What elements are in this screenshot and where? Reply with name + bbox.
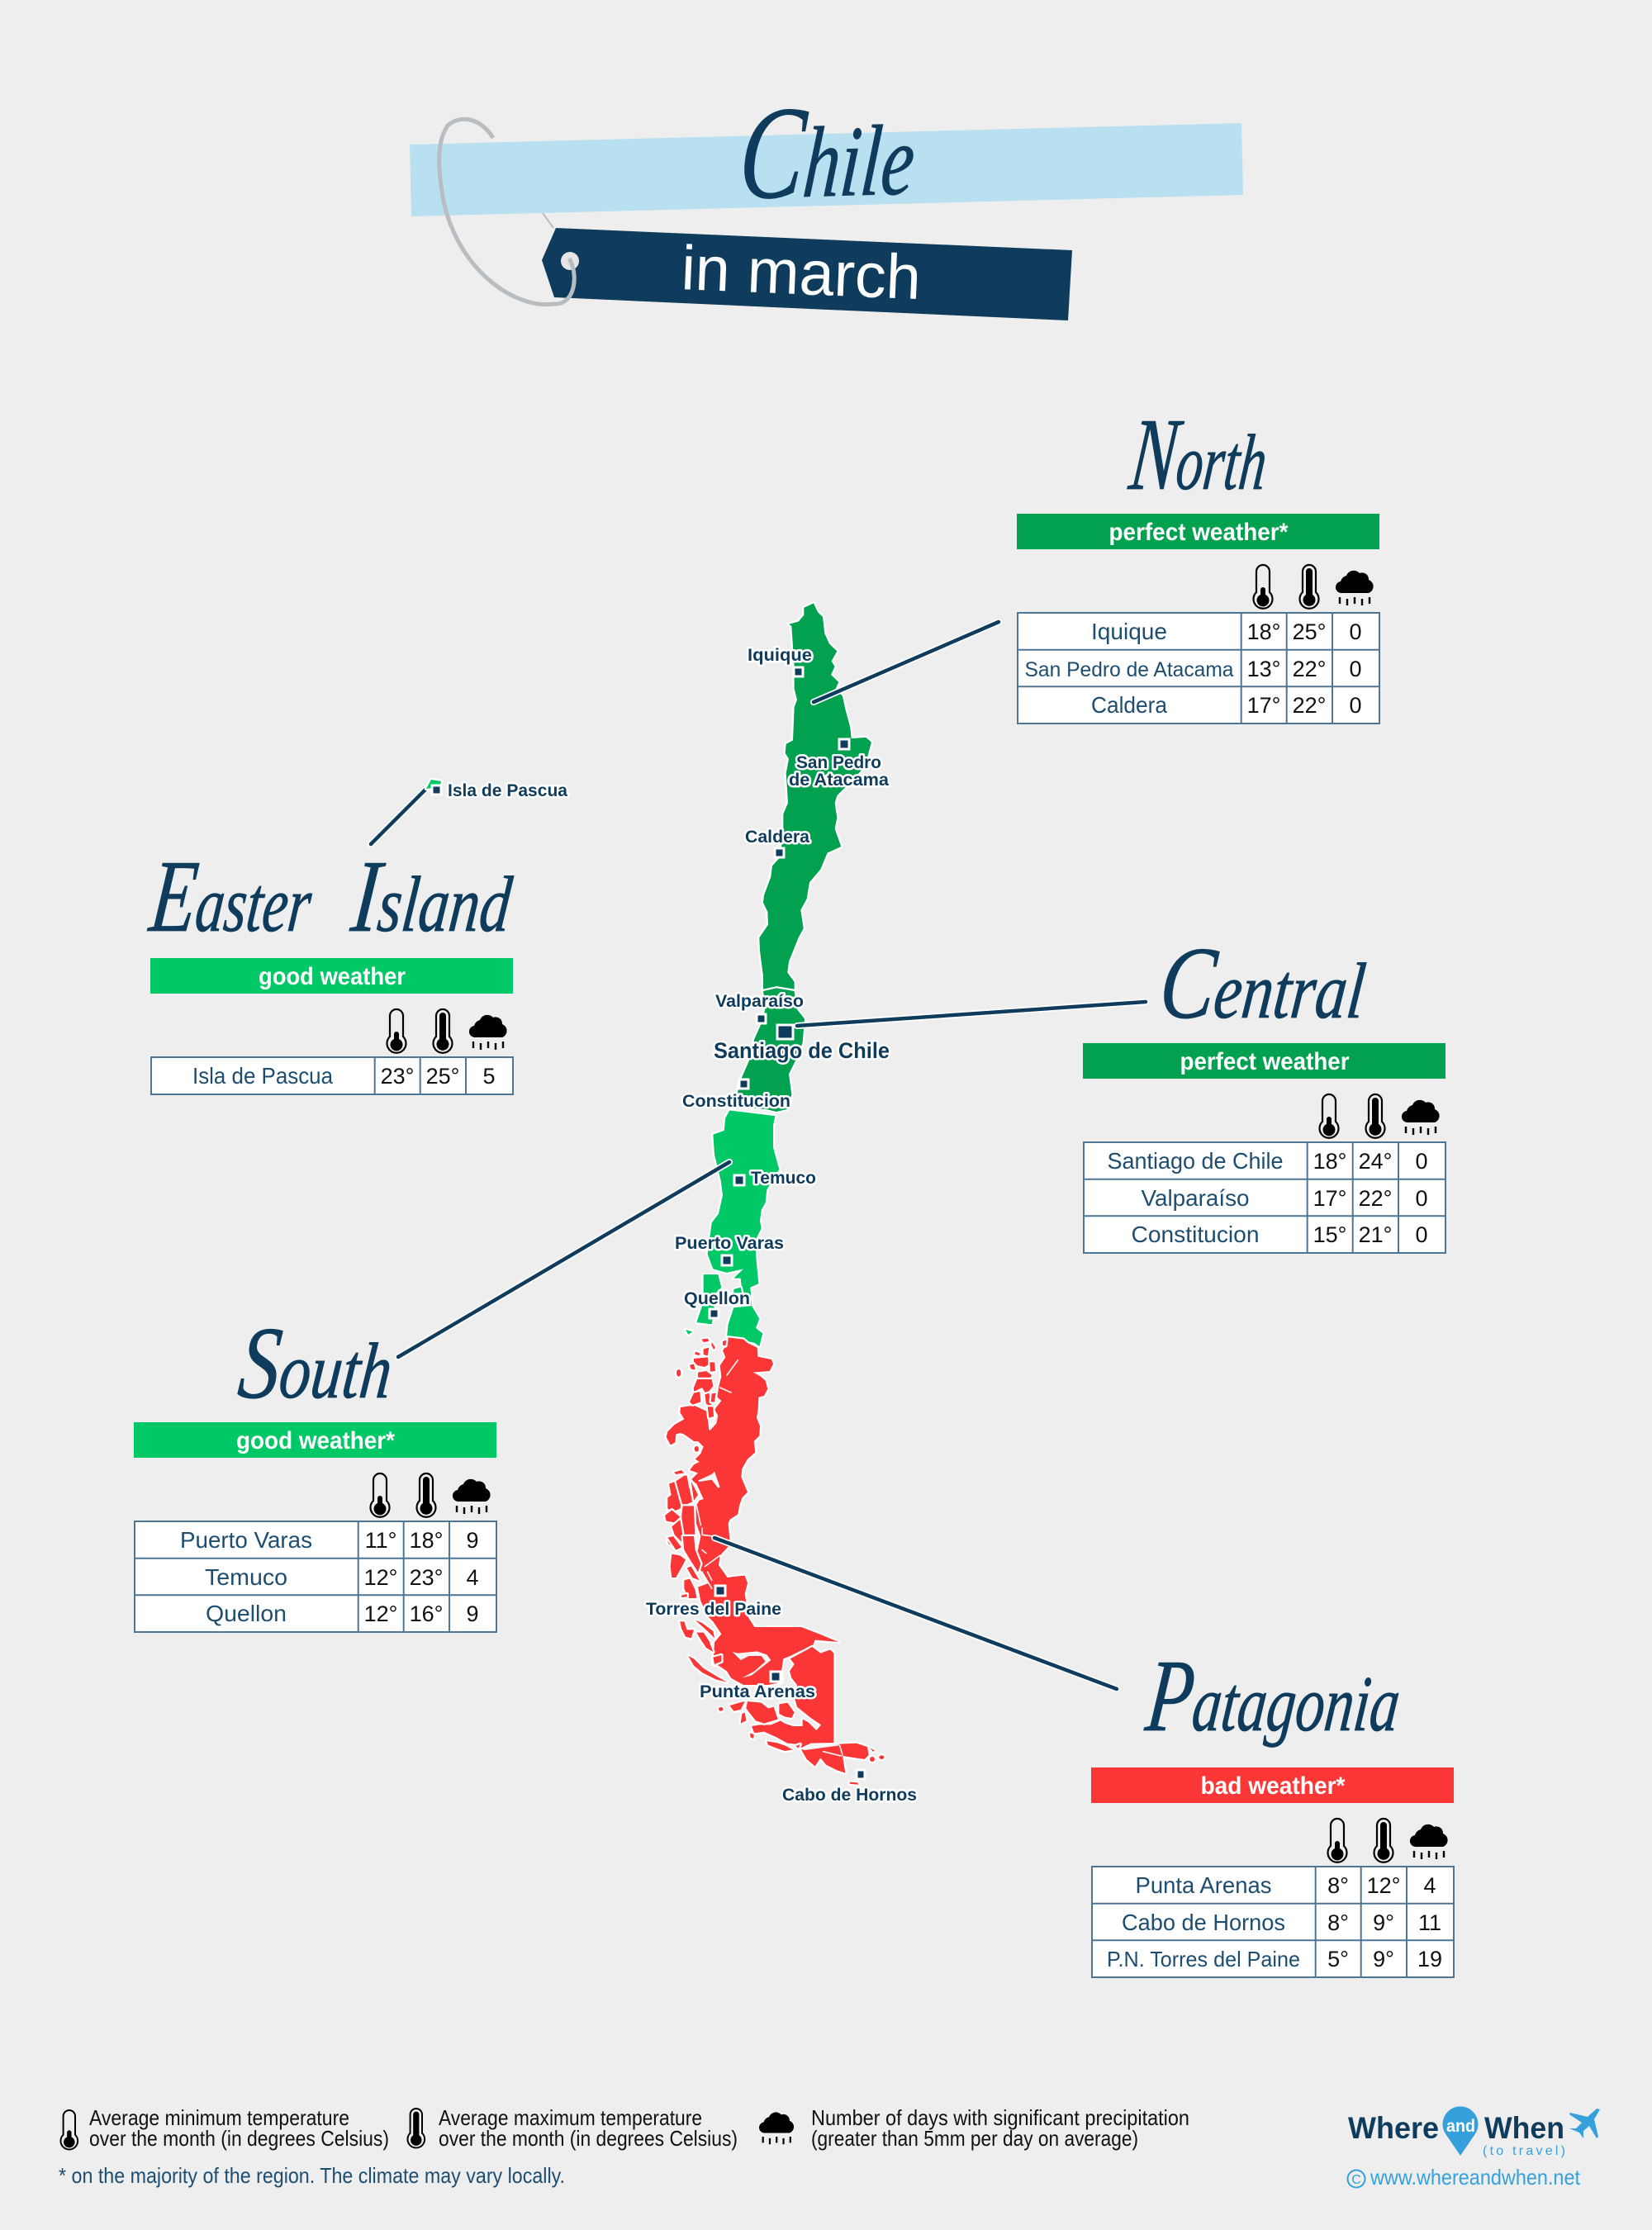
climate table: Iquique xyxy=(1091,619,1167,644)
climate table xyxy=(1084,1142,1446,1253)
city markers and labels: Quellon xyxy=(684,1289,750,1308)
climate table: 8° xyxy=(1327,1873,1349,1898)
climate table: 11° xyxy=(365,1528,396,1553)
legend text: precipitation xyxy=(811,2105,1189,2151)
climate table: Isla de Pascua xyxy=(192,1063,333,1089)
heading: South: South xyxy=(234,1306,399,1421)
city markers and labels: Puerto Varas xyxy=(675,1234,784,1253)
climate table xyxy=(151,1057,513,1094)
Strait of Magellan and Tierra del Fuego xyxy=(719,1647,884,1785)
heading: Easter Island: Island xyxy=(346,839,518,954)
footnote: * on the majority of the region. The climate may vary locally. xyxy=(59,2163,565,2188)
climate table: 9 xyxy=(466,1601,479,1626)
legend text: maximum: Average maximum temperature xyxy=(439,2105,702,2130)
climate table: 23° xyxy=(410,1565,443,1590)
region: south xyxy=(686,1110,779,1346)
logo: Where and When: (to travel) xyxy=(1483,2144,1565,2158)
climate table: 23° xyxy=(381,1064,414,1089)
city markers and labels: Temuco xyxy=(751,1169,816,1188)
panel: easter island xyxy=(145,839,518,1094)
climate table: 18° xyxy=(1313,1149,1346,1174)
icon: precipitation xyxy=(759,2112,794,2144)
climate table: 9° xyxy=(1373,1910,1394,1935)
climate table: 15° xyxy=(1313,1222,1346,1247)
southern channels and islands xyxy=(667,1536,727,1682)
rating banner xyxy=(134,1422,496,1458)
mainland xyxy=(665,1337,838,1685)
climate table: 9 xyxy=(466,1528,479,1553)
climate table: Quellon xyxy=(206,1601,287,1626)
region: patagonia xyxy=(665,1337,884,1785)
logo: Where and When: C xyxy=(1351,2173,1361,2187)
climate table: 9° xyxy=(1373,1947,1394,1971)
climate table: 22° xyxy=(1359,1186,1392,1211)
climate table: 0 xyxy=(1349,693,1362,718)
climate table: 25° xyxy=(1293,619,1326,644)
panel: north xyxy=(1017,397,1379,724)
climate table xyxy=(135,1521,496,1632)
climate table: 11 xyxy=(1418,1910,1441,1935)
connector: north xyxy=(814,622,999,702)
rating banner: perfect weather xyxy=(1180,1048,1350,1075)
region: central xyxy=(735,988,805,1112)
icons xyxy=(387,1009,507,1053)
icons xyxy=(1254,565,1374,609)
climate table: 22° xyxy=(1293,657,1326,681)
legend text: minimum: Average minimum temperature xyxy=(89,2105,349,2130)
climate table: Punta Arenas xyxy=(1135,1872,1272,1898)
climate table: Temuco xyxy=(205,1564,287,1590)
climate table: 18° xyxy=(410,1528,443,1553)
connector: central xyxy=(797,1002,1146,1026)
icons xyxy=(370,1473,491,1517)
rating banner xyxy=(1017,514,1379,549)
connector: easter island xyxy=(371,790,425,844)
legend text: minimum xyxy=(89,2105,389,2151)
rating banner: good weather* xyxy=(236,1427,395,1454)
climate table: 17° xyxy=(1247,693,1280,718)
climate table: Santiago de Chile xyxy=(1107,1148,1284,1174)
climate table: 17° xyxy=(1313,1186,1346,1211)
climate table: 12° xyxy=(364,1601,397,1626)
city markers and labels: San Pedro xyxy=(796,753,881,772)
Easter Island marker: Isla de Pascua xyxy=(448,781,567,800)
connector: south xyxy=(398,1162,729,1357)
climate table: 4 xyxy=(466,1565,479,1590)
heading: Patagonia: Patagonia xyxy=(1141,1639,1407,1753)
city markers and labels: Torres del Paine xyxy=(646,1600,781,1619)
climate table: P.N. Torres del Paine xyxy=(1107,1947,1300,1971)
heading: Central: Central xyxy=(1155,926,1372,1041)
logo: Where and When: and xyxy=(1446,2117,1475,2136)
rating banner xyxy=(1083,1043,1446,1079)
logo: Where and When: When xyxy=(1484,2111,1564,2145)
climate table: 25° xyxy=(426,1064,459,1089)
climate table xyxy=(1018,613,1379,724)
city markers and labels: Cabo de Hornos xyxy=(782,1786,917,1805)
climate table: 21° xyxy=(1359,1222,1392,1247)
logo: Where and When: Where xyxy=(1348,2111,1439,2145)
title text: Chile xyxy=(734,76,921,227)
climate table: 0 xyxy=(1415,1222,1428,1247)
rating banner: bad weather* xyxy=(1201,1772,1346,1800)
rating banner: good weather xyxy=(259,963,406,990)
city markers and labels: Santiago de Chile xyxy=(714,1038,890,1063)
icons xyxy=(1328,1819,1448,1862)
tag string xyxy=(543,213,553,228)
climate table: 18° xyxy=(1247,619,1280,644)
city markers and labels: Iquique xyxy=(748,646,812,665)
city markers and labels: Punta Arenas xyxy=(700,1682,815,1701)
icon: maximum temperature xyxy=(407,2109,425,2147)
climate table: Puerto Varas xyxy=(180,1527,312,1553)
title band xyxy=(410,123,1243,216)
climate table: 0 xyxy=(1415,1186,1428,1211)
legend text: precipitation: (greater than 5mm per day on average) xyxy=(811,2126,1138,2151)
panel: south xyxy=(134,1306,496,1632)
climate table: Constitucion xyxy=(1132,1222,1259,1247)
city markers and labels: Caldera xyxy=(745,828,809,847)
heading: Easter Island: Easter xyxy=(145,839,318,954)
panel: patagonia xyxy=(1091,1639,1454,1977)
city markers and labels xyxy=(646,646,917,1805)
subtitle tag shape xyxy=(542,228,1072,320)
logo: Where and When xyxy=(1348,2106,1600,2190)
legend text: maximum: over the month (in degrees Celsius) xyxy=(439,2126,738,2151)
climate table: 12° xyxy=(1367,1873,1400,1898)
icon: minimum temperature xyxy=(60,2110,78,2149)
climate table: 0 xyxy=(1349,657,1362,681)
climate table: 13° xyxy=(1247,657,1280,681)
climate table: 8° xyxy=(1327,1910,1349,1935)
climate table: 0 xyxy=(1349,619,1362,644)
climate table: 0 xyxy=(1415,1149,1428,1174)
city markers and labels: Valparaíso xyxy=(715,992,804,1011)
legend text: maximum xyxy=(439,2105,738,2151)
legend text: precipitation: Number of days with significant precipitation xyxy=(811,2105,1189,2130)
climate table: Caldera xyxy=(1091,692,1167,718)
climate table: 24° xyxy=(1359,1149,1392,1174)
legend text: minimum: over the month (in degrees Celsius) xyxy=(89,2126,389,2151)
subtitle text: in march xyxy=(680,233,923,313)
climate table: 5 xyxy=(482,1064,496,1089)
climate table xyxy=(1092,1867,1454,1977)
climate table: Valparaíso xyxy=(1142,1185,1249,1211)
climate table: 4 xyxy=(1423,1873,1436,1898)
climate table: San Pedro de Atacama xyxy=(1024,658,1234,681)
city markers and labels: Constitucion xyxy=(682,1092,790,1111)
legend xyxy=(60,2105,1189,2151)
heading: North: North xyxy=(1124,397,1274,512)
climate table: 5° xyxy=(1327,1947,1349,1971)
logo: Where and When: www.whereandwhen.net xyxy=(1370,2165,1581,2190)
climate table: 12° xyxy=(364,1565,397,1590)
rating banner xyxy=(150,958,513,994)
rating banner: perfect weather* xyxy=(1108,519,1289,546)
panel: central xyxy=(1083,926,1446,1253)
climate table: 22° xyxy=(1293,693,1326,718)
tag hole xyxy=(561,252,579,270)
climate table: Cabo de Hornos xyxy=(1122,1910,1285,1935)
city markers and labels: de Atacama xyxy=(789,771,889,790)
connector: patagonia xyxy=(714,1538,1117,1689)
climate table: 19 xyxy=(1417,1947,1442,1971)
region: north xyxy=(759,603,871,989)
title tag xyxy=(410,76,1243,320)
icons xyxy=(1320,1094,1440,1138)
tag ring xyxy=(439,119,574,305)
map of Chile xyxy=(371,603,1146,1805)
climate table: 16° xyxy=(410,1601,443,1626)
heading: Easter Island xyxy=(145,839,518,954)
rating banner xyxy=(1091,1767,1454,1803)
